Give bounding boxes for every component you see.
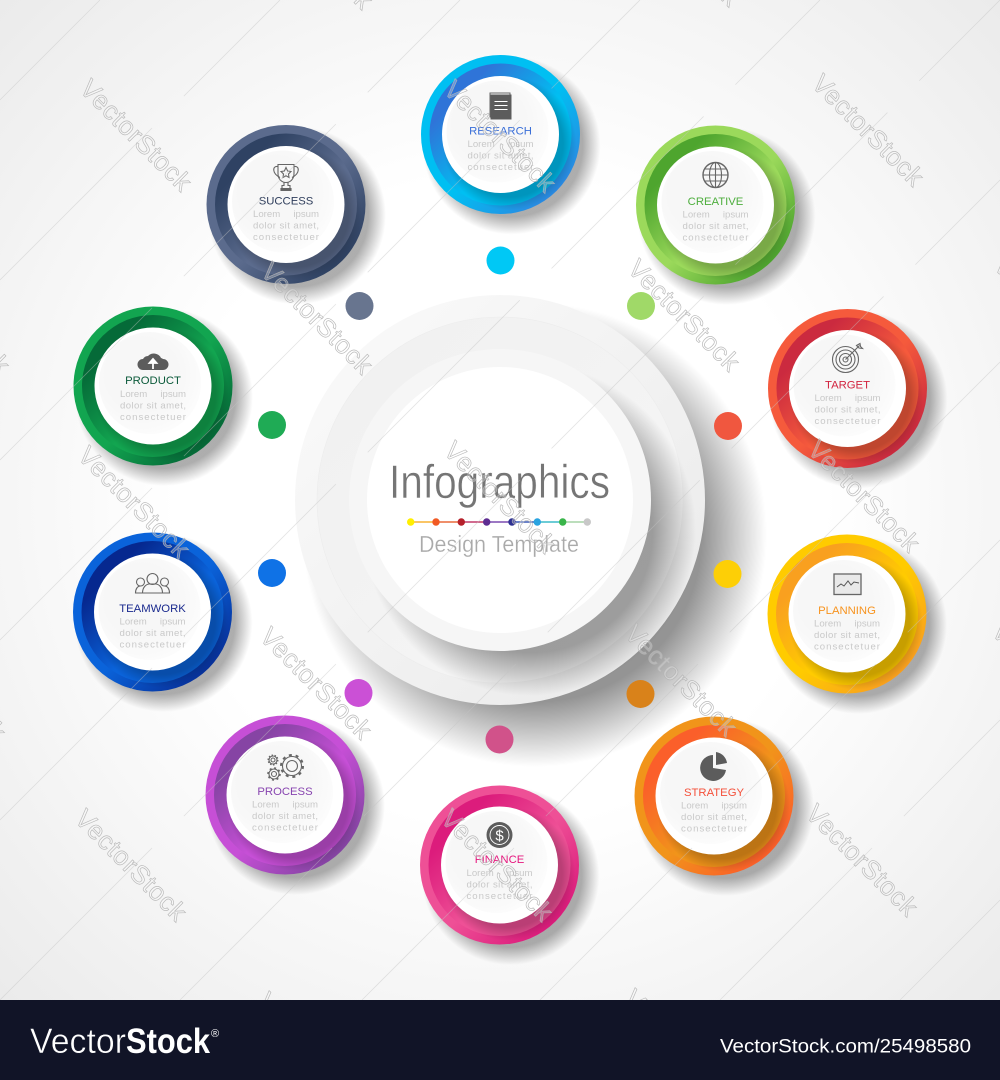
body text — [120, 389, 187, 423]
watermarks: VectorStock — [619, 618, 744, 743]
timeline of dots — [407, 518, 591, 526]
icon: cloud upload — [138, 354, 168, 370]
body text: consectetuer — [814, 642, 881, 652]
icon: target — [832, 344, 862, 372]
label: PROCESS — [257, 786, 313, 798]
body text — [468, 139, 534, 173]
body text: consectetuer — [466, 891, 533, 902]
body text — [253, 209, 320, 243]
node: teamwork — [73, 532, 252, 712]
central middle disc — [317, 317, 683, 683]
body text — [682, 210, 749, 244]
body text — [814, 618, 881, 652]
body text: ipsum — [854, 618, 880, 630]
body text: ipsum — [292, 800, 318, 810]
footer logo bold: Stock — [126, 1022, 210, 1061]
body text: Lorem — [252, 800, 279, 810]
footer logo: Vector — [30, 1022, 126, 1061]
body text: ipsum — [721, 800, 747, 812]
body text — [120, 616, 186, 650]
node: finance — [420, 786, 600, 965]
body text: ipsum — [160, 389, 186, 400]
body text: dolor sit amet, — [468, 150, 534, 162]
node: target — [768, 309, 948, 488]
watermarks: VectorStock — [438, 435, 563, 560]
body text: ipsum — [723, 210, 749, 220]
watermarks: VectorStock — [74, 73, 199, 198]
watermarks: VectorStock — [800, 798, 925, 923]
body text: dolor sit amet, — [120, 400, 186, 412]
label: TEAMWORK — [119, 603, 186, 615]
body text: consectetuer — [682, 232, 749, 244]
body text: consectetuer — [120, 640, 186, 650]
node: success — [206, 125, 386, 304]
body text: dolor sit amet, — [682, 221, 748, 232]
icon: globe — [703, 162, 728, 188]
body text: consectetuer — [253, 232, 320, 243]
watermarks: VectorStock — [255, 256, 380, 381]
central inner disc shadow — [364, 364, 696, 696]
icon: document — [490, 93, 512, 120]
icon: gears — [268, 755, 303, 780]
node: planning — [768, 534, 947, 714]
footer registered mark: ® — [211, 1028, 219, 1040]
watermarks: VectorStock — [438, 74, 563, 199]
central inner disc — [349, 349, 651, 651]
node: research — [421, 55, 600, 234]
label: TARGET — [825, 380, 870, 392]
body text: Lorem — [466, 868, 494, 879]
node: process — [206, 716, 385, 895]
label: CREATIVE — [688, 196, 744, 208]
body text: dolor sit amet, — [814, 404, 880, 416]
central inner highlight — [367, 367, 633, 633]
watermarks: VectorStock — [69, 803, 194, 928]
footer bar — [0, 1000, 1000, 1080]
label: SUCCESS — [259, 196, 314, 208]
body text: dolor sit amet, — [466, 880, 532, 890]
body text: Lorem — [681, 800, 708, 812]
body text — [814, 393, 881, 427]
body text: dolor sit amet, — [253, 220, 319, 232]
body text: Lorem — [253, 209, 280, 220]
icon: trophy — [274, 164, 298, 190]
title: Infographics — [389, 455, 610, 508]
connector dots — [258, 246, 742, 754]
body text: Lorem — [814, 393, 842, 404]
icon: chart — [834, 574, 861, 594]
node: strategy — [634, 716, 814, 896]
icon: pie chart — [700, 752, 727, 781]
watermarks: VectorStock — [72, 440, 197, 565]
body text: dolor sit amet, — [814, 630, 880, 641]
icon: people — [136, 574, 170, 593]
label: PLANNING — [818, 605, 876, 617]
body text: consectetuer — [814, 416, 881, 427]
body text: consectetuer — [681, 824, 748, 834]
body text: ipsum — [507, 868, 533, 879]
body text: dolor sit amet, — [681, 812, 747, 823]
body text: dolor sit amet, — [252, 811, 318, 822]
body text: consectetuer — [252, 822, 319, 834]
subtitle: Design Template — [419, 531, 579, 557]
body text: consectetuer — [120, 412, 187, 423]
watermarks: VectorStock — [435, 803, 560, 928]
body text: ipsum — [293, 209, 319, 220]
body text: Lorem — [120, 389, 147, 400]
watermarks: VectorStock — [806, 68, 931, 193]
body text: ipsum — [160, 616, 186, 628]
icon: coin: $ — [495, 828, 504, 844]
label: PRODUCT — [125, 375, 181, 387]
central disc group — [295, 295, 767, 767]
body text: dolor sit amet, — [120, 628, 186, 639]
label: RESEARCH — [469, 126, 532, 138]
central disc shadow — [303, 303, 767, 767]
body text: Lorem — [468, 139, 495, 150]
body text: ipsum — [855, 393, 881, 404]
label: STRATEGY — [684, 787, 744, 799]
watermarks: VectorStock — [802, 434, 927, 559]
footer image id: VectorStock.com/25498580 — [720, 1036, 971, 1058]
central outer disc — [295, 295, 705, 705]
watermarks: VectorStock — [622, 253, 747, 378]
label: FINANCE — [475, 854, 525, 866]
body text — [681, 800, 748, 834]
watermarks: VectorStock — [254, 621, 379, 746]
node: product — [74, 306, 253, 486]
body text: Lorem — [682, 210, 710, 220]
body text: Lorem — [814, 618, 841, 630]
body text: ipsum — [508, 139, 534, 150]
body text: consectetuer — [468, 162, 534, 173]
body text: Lorem — [120, 616, 147, 628]
body text — [252, 800, 319, 834]
icon: coin — [486, 822, 512, 848]
node: creative — [636, 126, 816, 305]
body text — [466, 868, 533, 902]
